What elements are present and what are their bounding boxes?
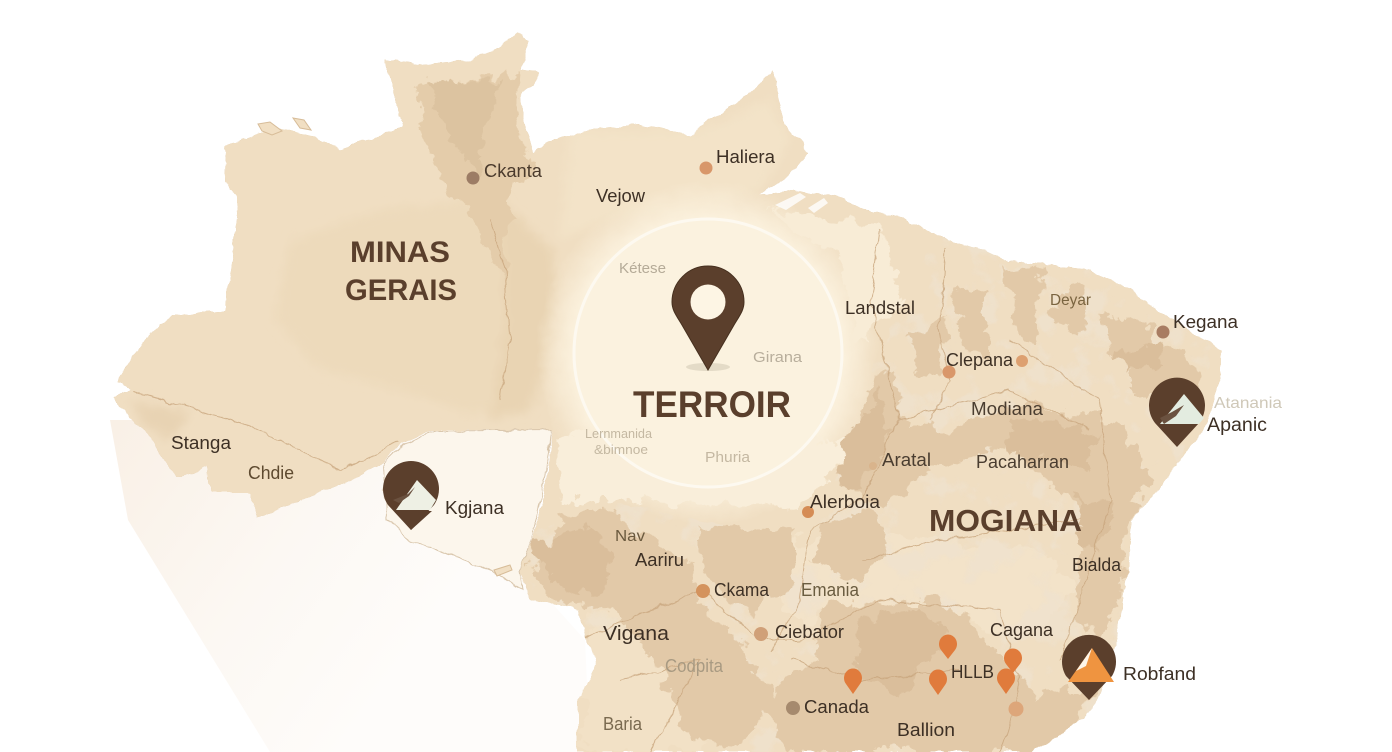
place labels: Kétese xyxy=(619,260,666,277)
heading: Mogiana: MOGIANA xyxy=(929,503,1082,538)
place labels: Deyar xyxy=(1050,292,1092,309)
heading: Minas Gerais xyxy=(345,236,457,307)
place labels: Ckanta xyxy=(484,161,543,181)
place labels: Chdie xyxy=(248,463,294,483)
place labels: Alerboia xyxy=(810,492,881,512)
mountain pin: Robfand xyxy=(1062,635,1116,700)
place labels: Aratal xyxy=(882,450,931,470)
place labels: Clepana xyxy=(946,350,1014,370)
place labels: Landstal xyxy=(845,298,915,318)
mountain pin: Kgjana xyxy=(383,461,439,530)
terroir pin icon xyxy=(672,266,744,371)
place labels: Bialda xyxy=(1072,555,1122,575)
heading: Minas Gerais: MINAS xyxy=(350,236,450,269)
place labels: Lernmanida xyxy=(585,426,653,441)
place labels: Emania xyxy=(801,580,860,600)
orange location pins xyxy=(844,635,1022,695)
place labels: Atanania xyxy=(1214,395,1282,412)
place labels: Ckama xyxy=(714,580,770,600)
place labels: Modiana xyxy=(971,399,1044,419)
heading: Terroir: TERROIR xyxy=(633,384,791,425)
place labels: Stanga xyxy=(171,433,232,453)
place labels: Pacaharran xyxy=(976,452,1069,472)
centre light zone xyxy=(542,194,869,514)
place labels: Phuria xyxy=(705,449,751,466)
map of Brazil regions xyxy=(100,20,1240,752)
pale background wash xyxy=(110,420,590,752)
place labels: Aariru xyxy=(635,550,684,570)
mountain pin: Apanic xyxy=(1149,378,1205,447)
base land xyxy=(100,20,1240,752)
noise blotches xyxy=(532,246,1184,752)
place labels: Canada xyxy=(804,697,870,717)
place labels: Kgjana xyxy=(445,498,505,518)
place labels: Nav xyxy=(615,528,645,545)
place labels: Girana xyxy=(753,349,803,366)
location dots xyxy=(466,162,1170,716)
region borders xyxy=(132,220,1110,752)
place labels: Codpita xyxy=(665,656,724,676)
place labels xyxy=(171,147,1282,740)
white gaps on the north coast xyxy=(775,193,828,213)
place labels: Ballion xyxy=(897,720,955,740)
west tones xyxy=(136,215,554,437)
place labels: Robfand xyxy=(1123,664,1196,684)
heading: Minas Gerais: GERAIS xyxy=(345,274,457,307)
terroir highlight circle xyxy=(574,219,842,487)
place labels: Baria xyxy=(603,714,643,734)
mottled patches, east and south xyxy=(530,265,1205,752)
place labels: Apanic xyxy=(1207,415,1267,436)
small coastal islets xyxy=(258,118,512,576)
place labels: Vejow xyxy=(596,186,646,206)
pale interior zone xyxy=(384,430,552,590)
lighter bands xyxy=(556,205,906,512)
place labels: Haliera xyxy=(716,147,776,167)
place labels: Vigana xyxy=(603,623,670,645)
place labels: HLLB xyxy=(951,662,994,682)
place labels: &bimnoe xyxy=(594,442,648,457)
place labels: Cagana xyxy=(990,620,1054,640)
place labels: Kegana xyxy=(1173,312,1239,332)
place labels: Ciebator xyxy=(775,622,844,642)
